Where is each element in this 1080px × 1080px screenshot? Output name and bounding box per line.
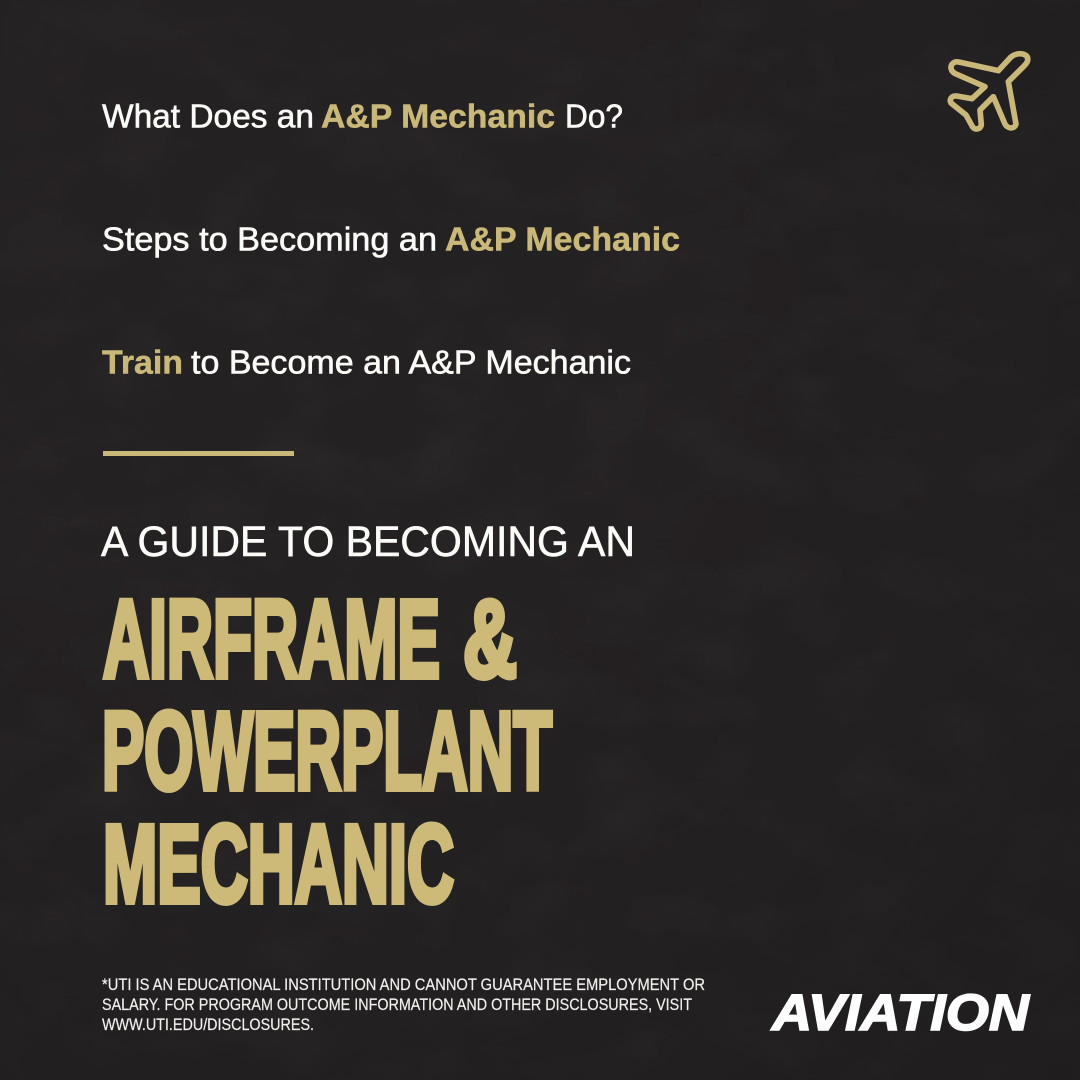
main title: Airframe & Powerplant Mechanic xyxy=(102,578,552,926)
main title: Airframe & Powerplant Mechanic: & xyxy=(463,578,517,701)
menu item: Steps to Becoming an A&P Mechanic xyxy=(102,220,680,258)
menu item: What Does an A&P Mechanic Do? xyxy=(102,98,623,134)
subheading: A guide to becoming an: A GUIDE TO BECOMING AN xyxy=(101,518,635,566)
menu item: What Does an A&P Mechanic Do?: A&P Mechanic xyxy=(321,98,555,134)
disclaimer text xyxy=(102,976,705,1034)
menu item: What Does an A&P Mechanic Do?: Do? xyxy=(565,98,623,134)
disclaimer text: WWW.UTI.EDU/DISCLOSURES. xyxy=(102,1016,314,1034)
logo: Aviation wordmark: AVIATION xyxy=(770,984,1030,1041)
main title: Airframe & Powerplant Mechanic: MECHANIC xyxy=(103,803,454,926)
menu item: What Does an A&P Mechanic Do?: What Does an xyxy=(102,98,314,134)
icon: airplane outline xyxy=(950,54,1028,129)
menu item: Train to Become an A&P Mechanic: to Become an A&P Mechanic xyxy=(191,344,631,380)
main title: Airframe & Powerplant Mechanic: POWERPLANT xyxy=(102,690,552,813)
menu item: Train to Become an A&P Mechanic: Train xyxy=(102,344,183,380)
disclaimer text: SALARY. FOR PROGRAM OUTCOME INFORMATION AND OTHER DISCLOSURES, VISIT xyxy=(102,996,692,1014)
divider rule xyxy=(103,451,294,456)
main title: Airframe & Powerplant Mechanic: AIRFRAME xyxy=(103,578,440,701)
disclaimer text: *UTI IS AN EDUCATIONAL INSTITUTION AND CANNOT GUARANTEE EMPLOYMENT OR xyxy=(102,976,705,994)
menu item: Steps to Becoming an A&P Mechanic: Steps to Becoming an xyxy=(102,220,437,258)
menu item: Steps to Becoming an A&P Mechanic: A&P Mechanic xyxy=(445,220,680,258)
